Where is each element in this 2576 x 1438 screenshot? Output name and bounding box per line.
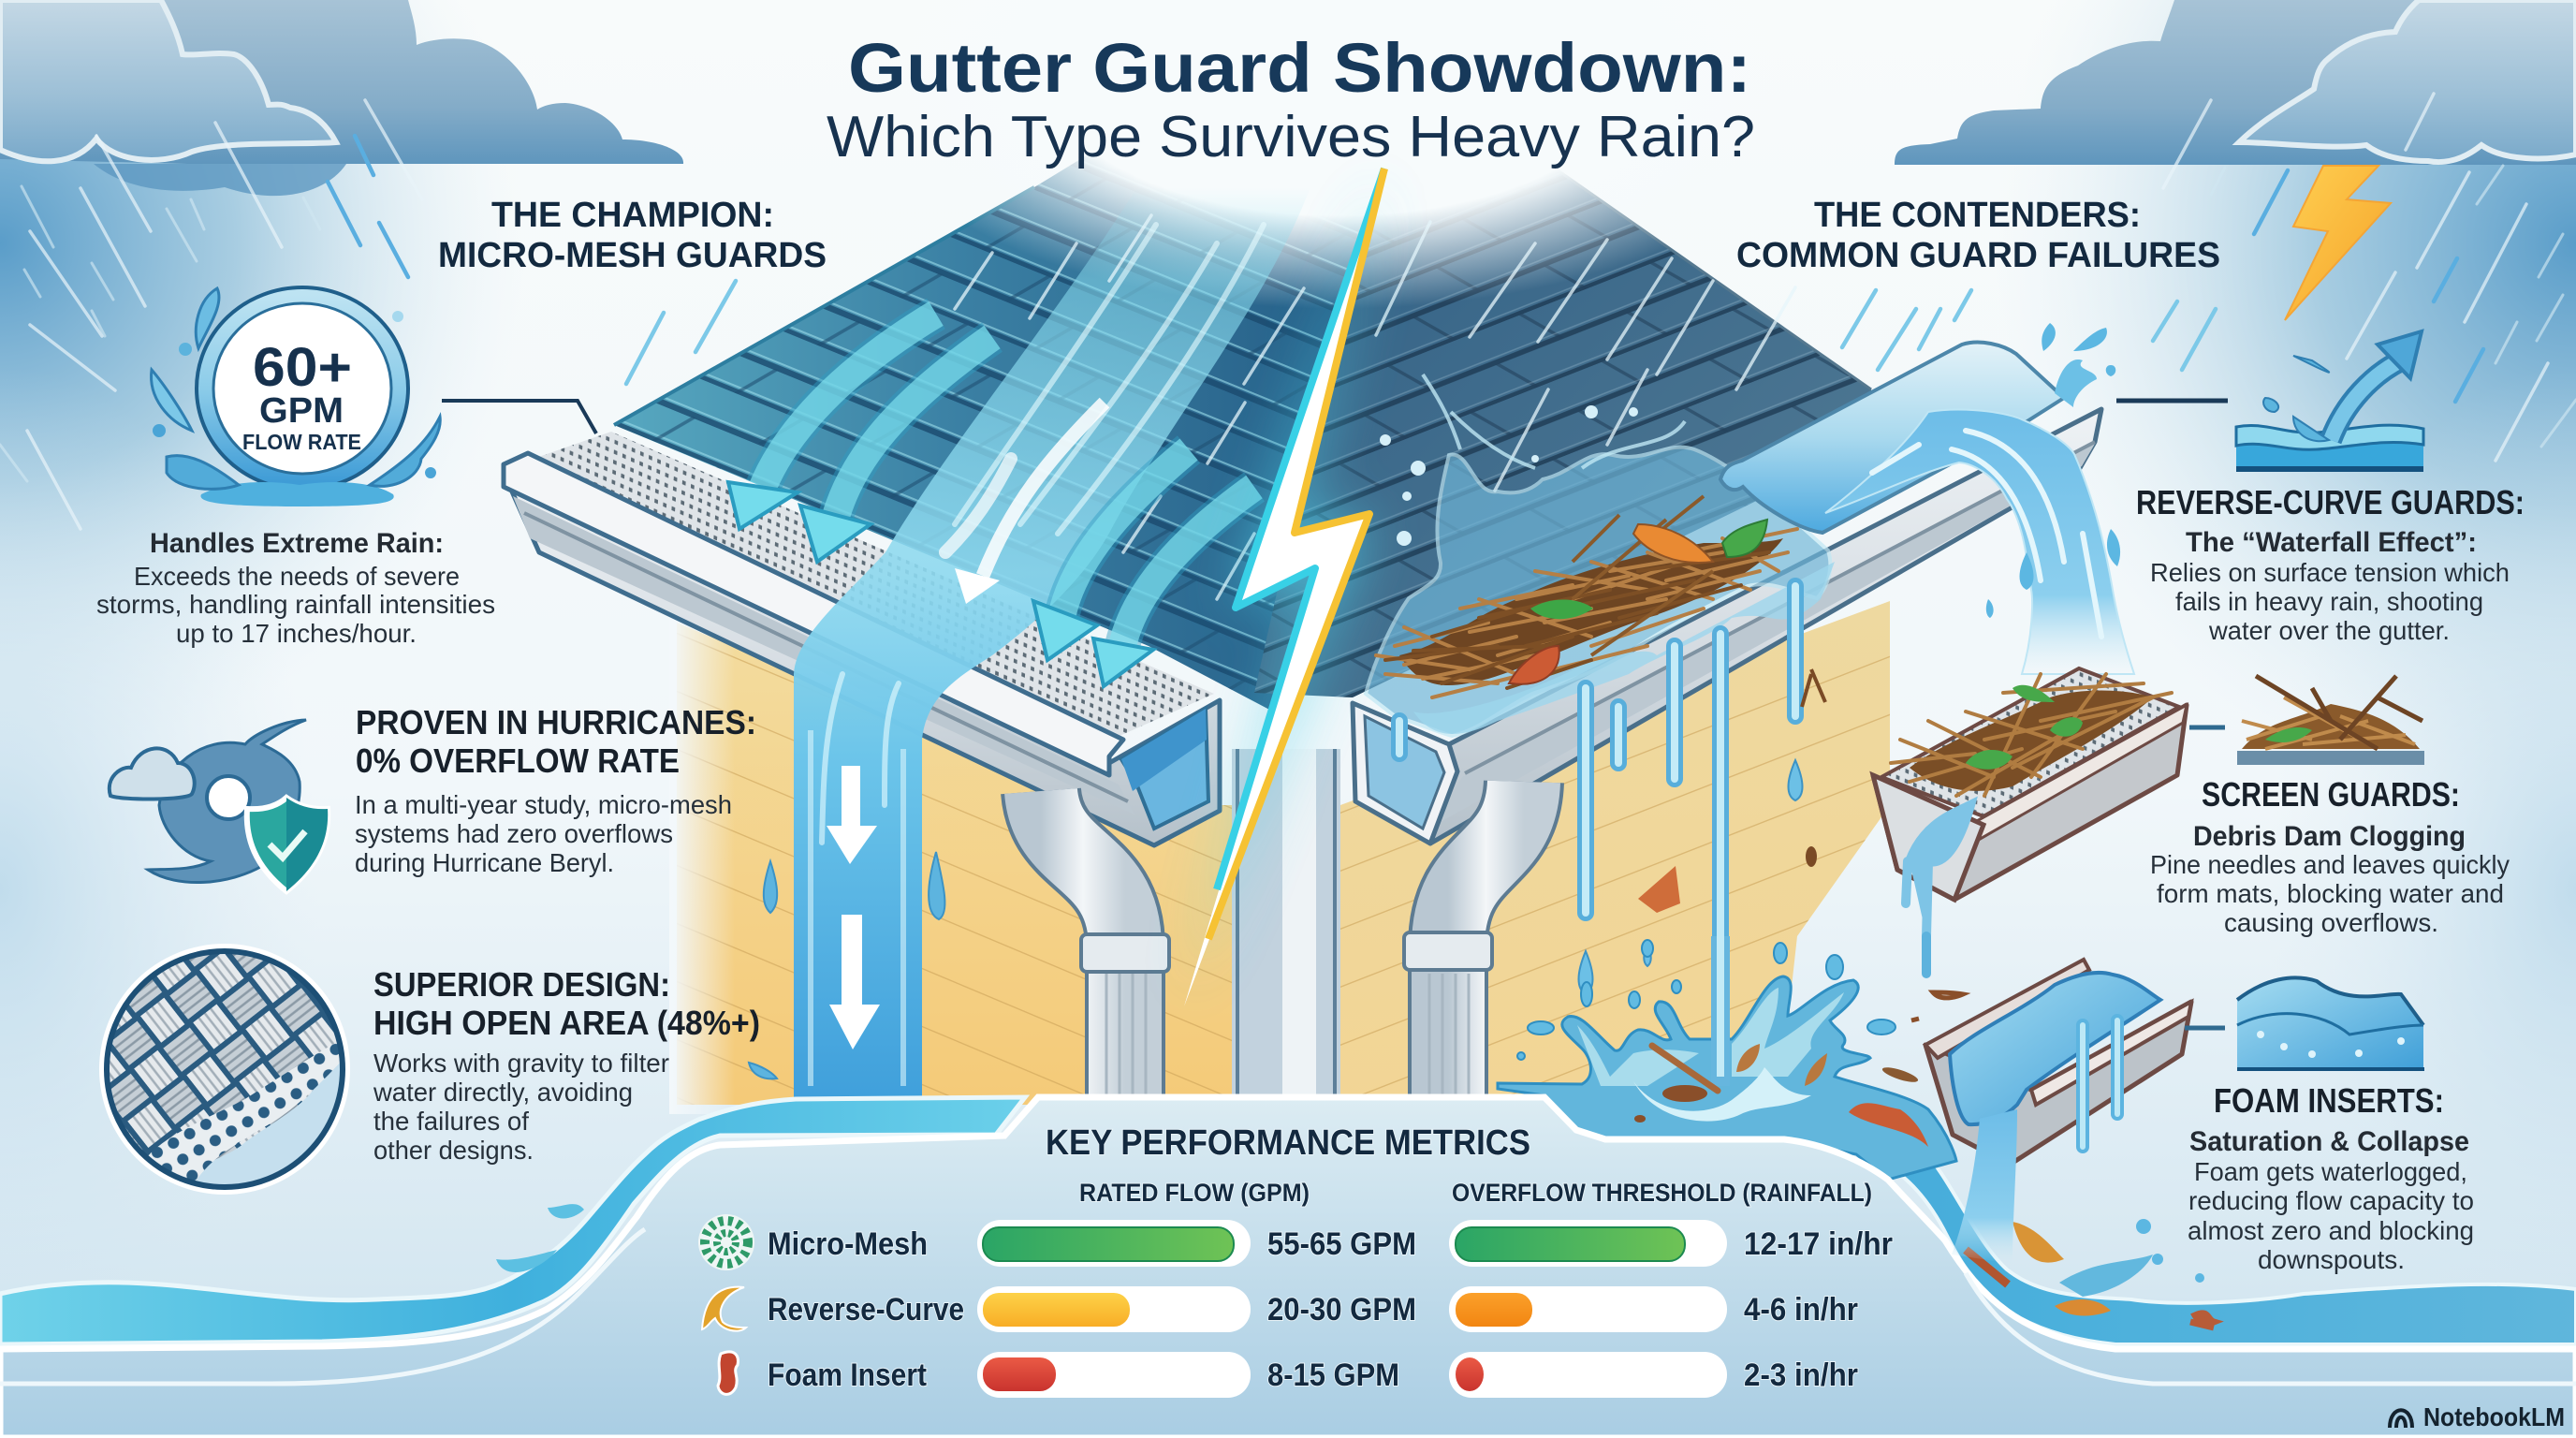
icon: saturated foam: [2237, 977, 2424, 1071]
leaves in right runoff: [1849, 1064, 2214, 1328]
flow arrows on roof: [728, 314, 1254, 686]
bottom water right: [1539, 1082, 2576, 1344]
storm clouds right: [1895, 0, 2576, 165]
icon: hurricane with shield: [110, 720, 328, 891]
text: superior design: the failures of: [373, 1107, 529, 1136]
text: handles extreme rain: Handles Extreme Rain:: [150, 528, 444, 559]
overflowing water on right gutter: [1366, 374, 1835, 1086]
metrics panel: [0, 1097, 2576, 1438]
text: screen guards: [2150, 775, 2510, 937]
text: superior design: Works with gravity to filter: [373, 1049, 669, 1078]
row: reverse-curve: 4-6 in/hr: [1744, 1292, 1858, 1328]
text: proven in hurricanes: systems had zero overflows: [355, 819, 673, 848]
column header: overflow threshold: OVERFLOW THRESHOLD (RAINFALL): [1452, 1179, 1872, 1207]
text: proven in hurricanes: PROVEN IN HURRICANES:: [356, 703, 756, 741]
row: foam insert: 2-3 in/hr: [1744, 1357, 1858, 1393]
water drops by stream: [749, 852, 944, 1078]
splash at base of right wall: [1498, 936, 1963, 1180]
text: superior design: other designs.: [373, 1136, 534, 1165]
icon: reverse-curve splash arrow: [2236, 331, 2423, 472]
roof fade to sky: [852, 0, 1825, 309]
callout line: flow rate to micro-mesh gutter: [442, 401, 596, 433]
text: superior design: SUPERIOR DESIGN:: [373, 965, 670, 1004]
row: micro-mesh: Micro-Mesh: [768, 1226, 928, 1262]
white downward arrows in stream: [827, 766, 880, 1049]
text: proven in hurricanes: [355, 703, 756, 877]
heading: the champion: [438, 196, 827, 275]
text: foam inserts: FOAM INSERTS:: [2214, 1081, 2444, 1120]
text: reverse-curve guards: [2136, 483, 2525, 645]
text: screen guards: Debris Dam Clogging: [2193, 821, 2466, 852]
metrics heading: KEY PERFORMANCE METRICS: [1046, 1123, 1530, 1163]
foam insert gutter illustration: [1925, 960, 2191, 1264]
text: proven in hurricanes: 0% OVERFLOW RATE: [356, 741, 680, 780]
icon: micro-mesh weave close-up: [99, 944, 350, 1195]
heading: the champion: THE CHAMPION:: [491, 196, 774, 235]
bottom water left: [0, 1097, 1025, 1344]
row: micro-mesh: 55-65 GPM: [1267, 1226, 1416, 1262]
title: Gutter Guard Showdown:: [848, 29, 1751, 107]
text: screen guards: Pine needles and leaves quickly: [2150, 850, 2510, 879]
row: micro-mesh: 12-17 in/hr: [1744, 1226, 1893, 1262]
right gutter: [1353, 409, 2101, 844]
text: handles extreme rain: up to 17 inches/hour.: [176, 619, 417, 648]
pine needle debris mat: [1376, 496, 1797, 697]
row: reverse-curve: 20-30 GPM: [1267, 1292, 1416, 1328]
row: foam insert: [718, 1352, 1858, 1398]
text: handles extreme rain: storms, handling rainfall intensities: [96, 590, 495, 619]
text: reverse-curve guards: fails in heavy rain, shooting: [2175, 587, 2483, 616]
row: reverse-curve: Reverse-Curve: [768, 1292, 964, 1328]
icon: flow rate ring: FLOW RATE: [242, 430, 361, 454]
text: screen guards: causing overflows.: [2224, 908, 2438, 937]
row: reverse-curve: [702, 1286, 1858, 1332]
text: proven in hurricanes: In a multi-year study, micro-mesh: [355, 790, 732, 819]
text: foam inserts: Saturation & Collapse: [2189, 1126, 2469, 1157]
left roof: [614, 94, 1404, 712]
text: screen guards: SCREEN GUARDS:: [2202, 775, 2460, 814]
text: screen guards: form mats, blocking water and: [2157, 879, 2504, 908]
icon: flow rate ring: 60+: [253, 337, 352, 398]
text: superior design: [373, 965, 760, 1165]
text: reverse-curve guards: water over the gutter.: [2208, 616, 2450, 645]
left gutter with micro-mesh: [504, 432, 1220, 845]
text: foam inserts: downspouts.: [2258, 1245, 2405, 1274]
heading: the champion: MICRO-MESH GUARDS: [438, 236, 827, 275]
heading: the contenders: COMMON GUARD FAILURES: [1736, 236, 2220, 275]
title: [827, 29, 1755, 169]
reverse-curve overflow tube and waterfall: [1720, 323, 2134, 674]
debris on right wall: [1638, 669, 1825, 913]
lightning bolt: [1184, 169, 1384, 1006]
title: Which Type Survives Heavy Rain?: [827, 105, 1755, 169]
text: superior design: HIGH OPEN AREA (48%+): [373, 1004, 760, 1042]
heading: the contenders: [1736, 196, 2220, 275]
text: proven in hurricanes: during Hurricane Beryl.: [355, 848, 614, 877]
text: handles extreme rain: Exceeds the needs of severe: [134, 562, 460, 591]
water sheet and vertical stream: [794, 187, 1310, 1105]
icon: flow rate ring: [152, 287, 440, 506]
row: foam insert: 8-15 GPM: [1267, 1357, 1399, 1393]
right roof: [1254, 112, 1881, 697]
text: reverse-curve guards: The “Waterfall Effect”:: [2186, 527, 2477, 558]
rain streaks: [0, 94, 2576, 529]
row: foam insert: Foam Insert: [768, 1357, 927, 1393]
icon: small lightning: [2285, 166, 2391, 320]
row: micro-mesh: [698, 1214, 1893, 1270]
left downspout: [1041, 791, 1169, 1105]
text: reverse-curve guards: Relies on surface tension which: [2150, 558, 2510, 587]
storm clouds left: [0, 0, 683, 196]
text: foam inserts: Foam gets waterlogged,: [2194, 1157, 2467, 1186]
callout line: screen guards: [2189, 725, 2225, 730]
text: handles extreme rain: [96, 528, 495, 648]
icon: debris on screen: [2237, 676, 2424, 765]
screen guard gutter illustration: [1873, 668, 2187, 974]
text: foam inserts: almost zero and blocking: [2188, 1216, 2474, 1245]
callout line: reverse-curve: [2116, 399, 2228, 403]
heading: the contenders: THE CONTENDERS:: [1814, 196, 2141, 235]
column header: rated flow: RATED FLOW (GPM): [1079, 1179, 1310, 1207]
callout line: foam inserts: [2185, 1026, 2225, 1030]
text: foam inserts: reducing flow capacity to: [2188, 1186, 2474, 1215]
text: superior design: water directly, avoiding: [373, 1078, 633, 1107]
icon: flow rate ring: GPM: [259, 391, 344, 431]
water droplets left of panel: [496, 1204, 584, 1272]
rain streaks over roof: [955, 215, 1795, 599]
house walls: [669, 601, 1890, 1114]
text: foam inserts: [2188, 1081, 2474, 1274]
right downspout: [1404, 782, 1524, 1105]
